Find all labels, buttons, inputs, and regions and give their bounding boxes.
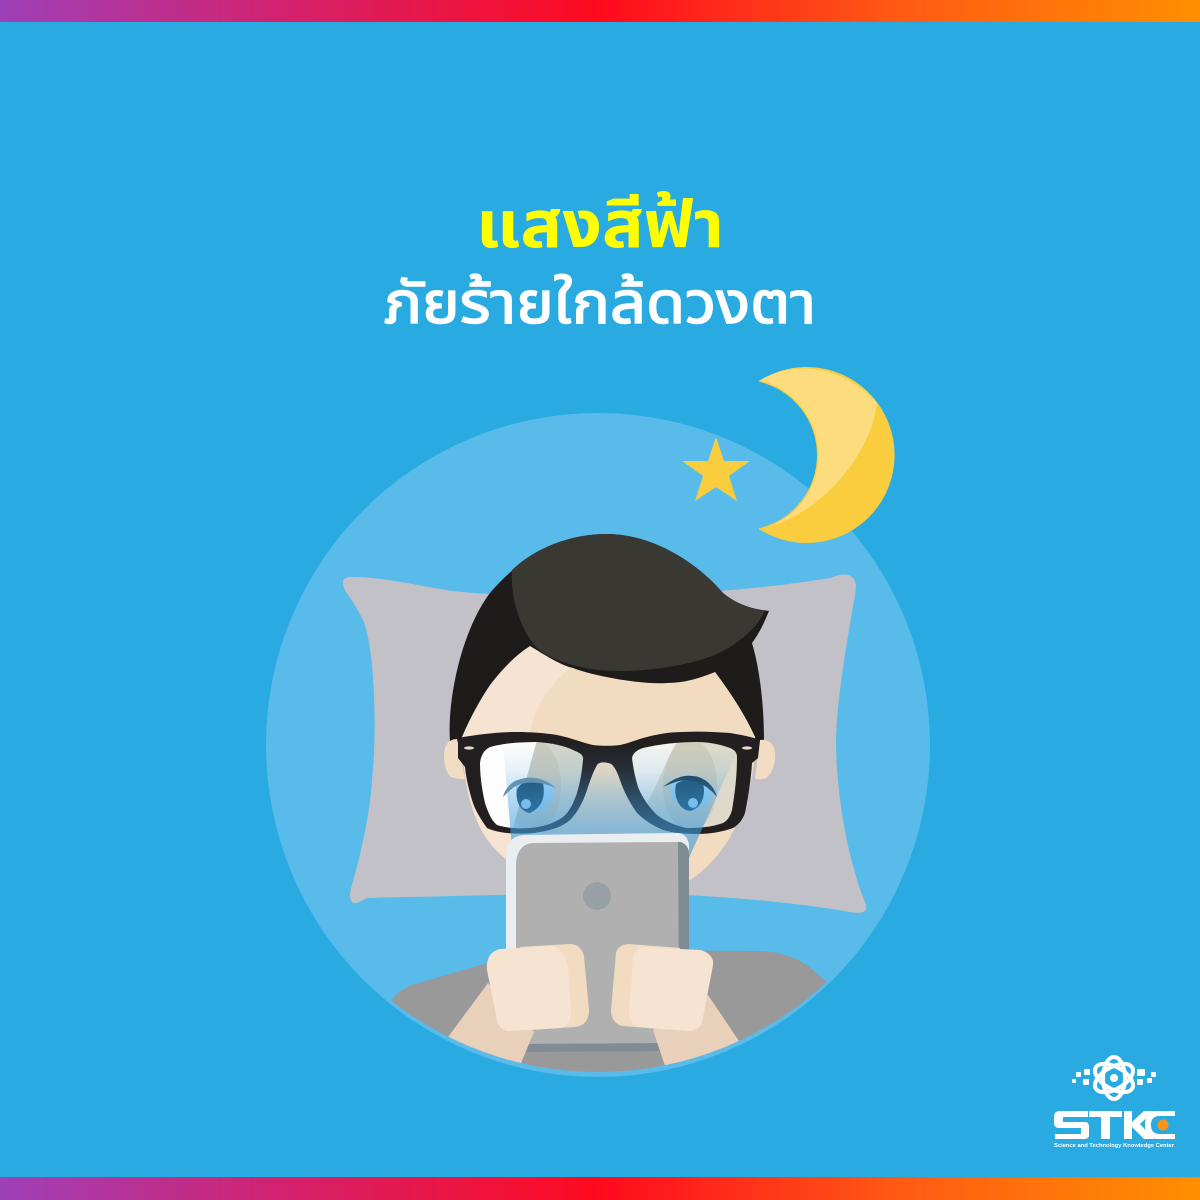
top gradient bar bbox=[0, 0, 1200, 22]
hair back bbox=[450, 534, 769, 742]
hair front bbox=[512, 534, 765, 671]
glasses frame bbox=[458, 732, 760, 834]
background circle bbox=[266, 413, 930, 1077]
logo: orange dot bbox=[1158, 1120, 1168, 1130]
title line 2: white: ภัยร้ายใกล้ดวงตา bbox=[384, 271, 816, 336]
left hand bbox=[487, 944, 589, 1031]
bottom gradient bar bbox=[0, 1177, 1200, 1200]
icon: star bbox=[682, 437, 750, 501]
logo: tagline: Science and Technology Knowledge Center bbox=[1054, 1143, 1175, 1149]
eye right bbox=[663, 776, 717, 811]
title line 1: yellow: แสงสีฟ้า bbox=[476, 187, 724, 261]
lens tint bbox=[513, 742, 737, 828]
shoulders and shirt bbox=[392, 950, 827, 1072]
right hand bbox=[611, 944, 713, 1031]
eye left bbox=[503, 778, 556, 813]
ears bbox=[444, 739, 775, 779]
face bbox=[462, 646, 755, 880]
hair shadow band bbox=[530, 630, 740, 683]
phone bbox=[506, 833, 689, 1052]
title bbox=[384, 187, 816, 336]
logo: dots bbox=[1072, 1069, 1156, 1085]
faint eye sockets bbox=[505, 739, 717, 831]
lens glare bbox=[480, 742, 676, 828]
face shading bbox=[529, 666, 755, 880]
glasses rivets bbox=[464, 746, 752, 750]
forearms bbox=[448, 983, 739, 1066]
icon: crescent moon bbox=[759, 367, 895, 543]
illustration: person in bed bbox=[343, 534, 866, 1090]
pillow bbox=[343, 575, 866, 913]
logo: STKC bbox=[1054, 1057, 1175, 1149]
logo: wordmark bbox=[1054, 1111, 1175, 1139]
logo: atom icon bbox=[1090, 1057, 1138, 1099]
blue light beam bbox=[503, 742, 737, 860]
